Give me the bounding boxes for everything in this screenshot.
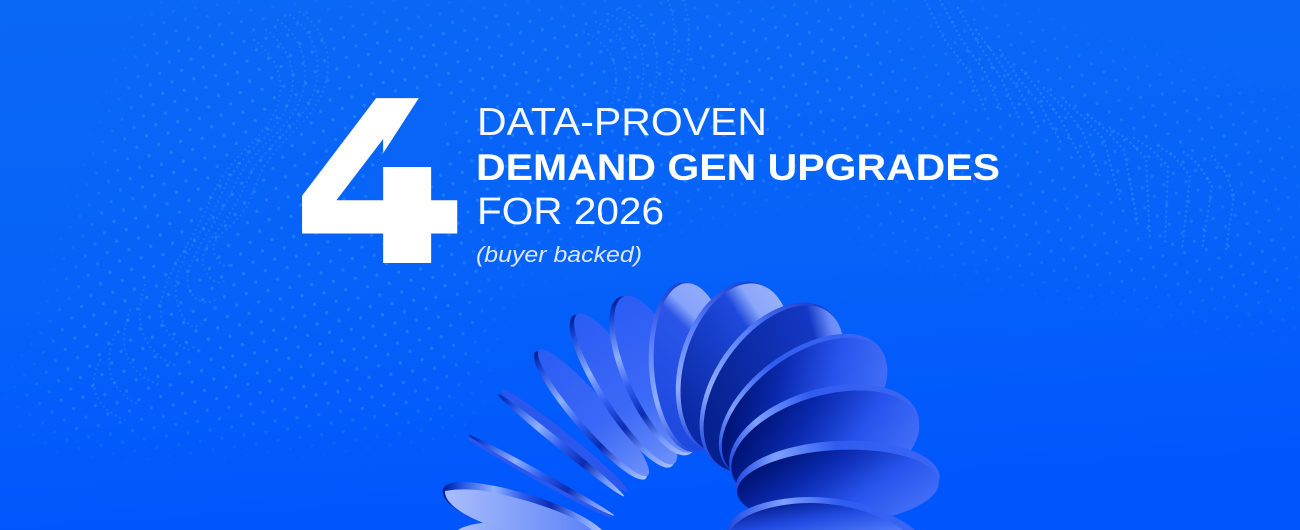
disc 14 (727, 497, 915, 530)
disc 11 (693, 305, 913, 509)
disc 1 bottom-left (458, 522, 556, 530)
disc 7 (591, 284, 719, 467)
title: headline text (476, 101, 1000, 267)
disc 10 (670, 276, 873, 498)
title: headline text: FOR 2026 (477, 191, 664, 233)
disc 8 (643, 279, 736, 455)
counter cut-out of the numeral (356, 94, 445, 195)
disc 9 (657, 268, 810, 467)
disc 2 (443, 482, 602, 530)
right ridge wave lines (925, 0, 1234, 250)
disc 12 (715, 363, 934, 524)
title: headline text: DEMAND GEN UPGRADES (476, 147, 1000, 188)
title: headline text: DATA-PROVEN (477, 101, 767, 144)
top centre wave lines (584, 0, 689, 112)
title: large numeral 4: 4 (292, 55, 467, 314)
disc 5 (523, 339, 660, 490)
left wave lines (94, 12, 328, 420)
disc 4 (496, 384, 632, 499)
disc 13 (734, 436, 942, 529)
disc 3 (465, 432, 616, 522)
illustration: arched glass disc spiral (443, 268, 942, 530)
disc 6 (554, 302, 692, 479)
title: headline text: (buyer backed) (476, 242, 642, 267)
